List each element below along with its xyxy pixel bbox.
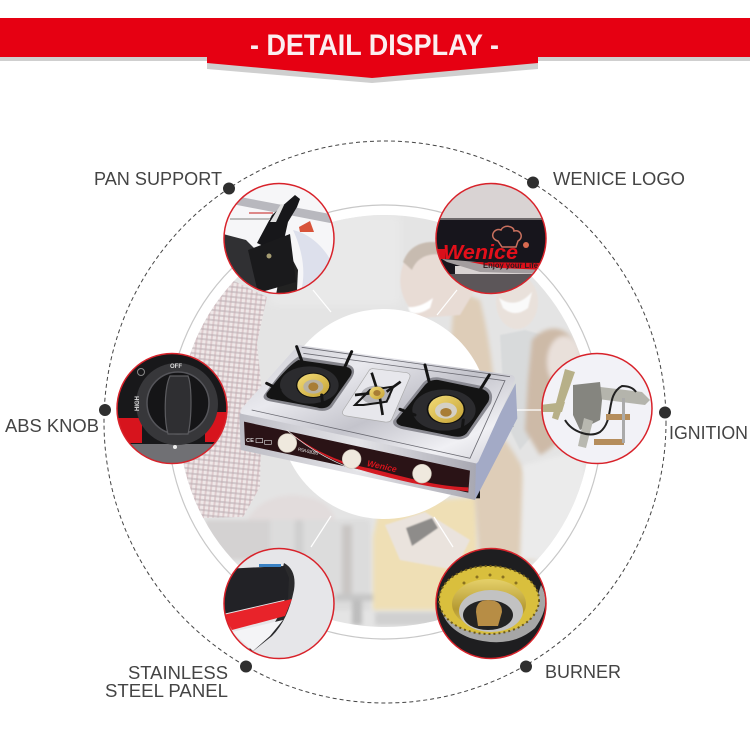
detail: abs knob: OFF bbox=[170, 364, 182, 370]
connector lines bbox=[311, 290, 541, 547]
photo: long blonde hair bbox=[450, 290, 538, 565]
photo: plaid shirt bbox=[183, 280, 267, 518]
photo: dotted blouse bbox=[518, 466, 542, 561]
photo: man with shirt bbox=[498, 280, 536, 448]
photo: smiling woman bbox=[400, 242, 475, 318]
label: ignition: IGNITION bbox=[669, 422, 748, 443]
photo: arm and bracelet bbox=[385, 512, 470, 570]
marker dots bbox=[99, 176, 671, 672]
gas stove product bbox=[239, 345, 517, 500]
logo wordmark: Wenice bbox=[443, 242, 518, 264]
stove: top surface bbox=[240, 345, 515, 464]
detail: ignition bbox=[540, 353, 653, 465]
photo: pot and kitchen shelf left bbox=[206, 500, 438, 626]
label: stainless steel panel: STAINLESS bbox=[128, 662, 228, 683]
stove: model and cert marks: RSA-5303S bbox=[297, 447, 319, 456]
stove: right burner bbox=[393, 365, 492, 439]
header band bbox=[0, 18, 750, 61]
stove: left burner bbox=[264, 347, 354, 411]
title: - DETAIL DISPLAY - bbox=[250, 29, 499, 62]
detail: wenice logo bbox=[435, 183, 547, 296]
detail: abs knob: HIGH bbox=[135, 396, 141, 411]
chef hat logo bbox=[493, 226, 521, 247]
stove: knobs bbox=[278, 434, 431, 483]
stove: back rim line bbox=[252, 347, 510, 458]
label: burner: BURNER bbox=[545, 661, 621, 682]
photo: right woman bbox=[525, 329, 585, 455]
detail: stainless steel panel bbox=[223, 548, 335, 660]
photo: back wall lighter patch bbox=[270, 215, 400, 305]
label: stainless steel panel: STEEL PANEL bbox=[105, 680, 228, 701]
stove: black control strip bbox=[244, 422, 470, 493]
outer dashed circle bbox=[104, 141, 666, 703]
detail: burner bbox=[435, 548, 547, 660]
label: stainless steel panel bbox=[105, 662, 228, 701]
white center circle bbox=[279, 309, 489, 519]
label: pan support: PAN SUPPORT bbox=[94, 168, 222, 189]
stove: model and cert marks: CE bbox=[246, 438, 254, 444]
detail: pan support bbox=[223, 183, 335, 295]
photo: yellow wall bbox=[373, 497, 477, 610]
logo tagline: Enjoy your Life bbox=[483, 260, 538, 270]
stove: model and cert marks bbox=[246, 438, 319, 456]
detail: abs knob bbox=[116, 353, 229, 466]
label: wenice logo: WENICE LOGO bbox=[553, 168, 685, 189]
background photo disc bbox=[170, 210, 600, 635]
stove: right side and feet bbox=[470, 383, 517, 500]
stove: brand mark: Wenice bbox=[366, 458, 398, 474]
stove: middle burner bbox=[343, 369, 410, 422]
stove: front panel bbox=[239, 413, 476, 500]
heading ribbon bbox=[207, 18, 538, 83]
label: abs knob: ABS KNOB bbox=[5, 415, 99, 436]
inner thin ring bbox=[168, 205, 602, 639]
